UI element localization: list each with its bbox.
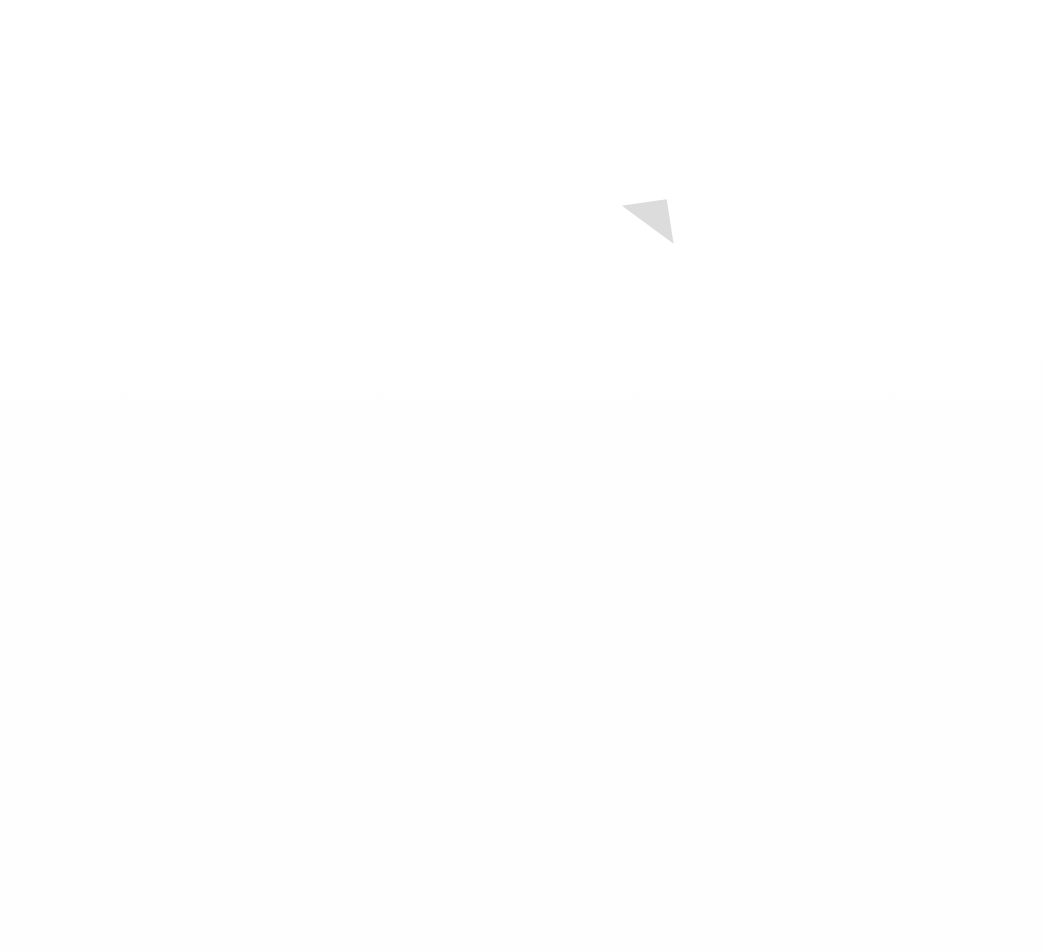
icon: grey triangle	[622, 199, 674, 244]
